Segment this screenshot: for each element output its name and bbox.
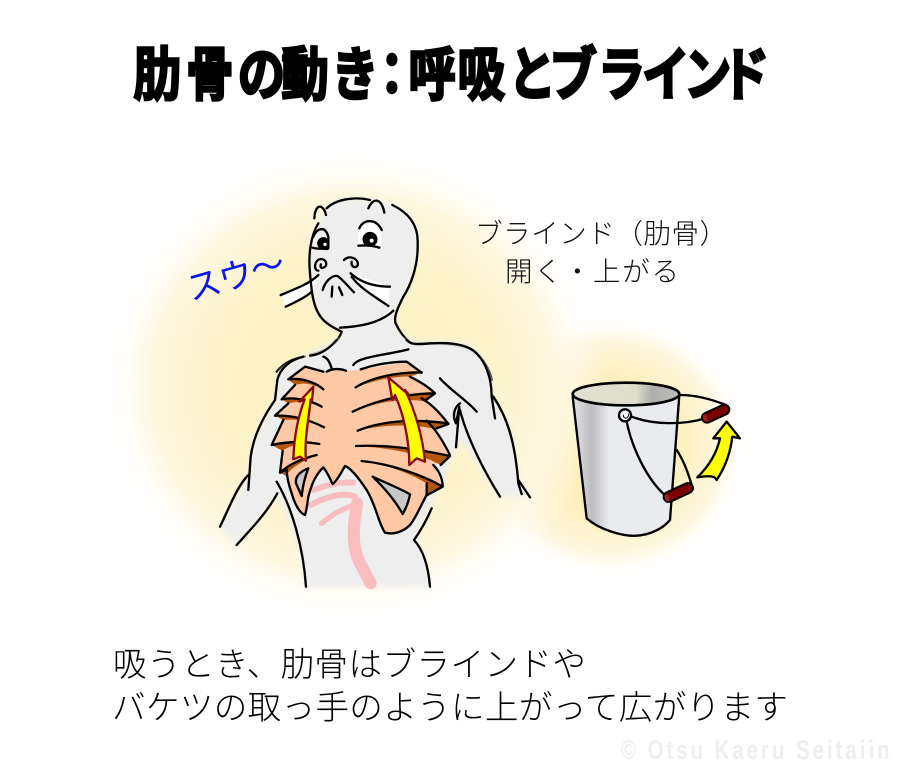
lower rib gaps	[296, 468, 308, 496]
figure: inhaling person	[220, 198, 530, 587]
caption: 吸うとき、肋骨はブラインドや	[113, 646, 586, 684]
yellow arrow: left	[293, 387, 313, 461]
rib cage shape	[272, 362, 450, 533]
label: blinds	[475, 218, 727, 287]
torso with rib cage	[220, 340, 530, 587]
bucket rim	[573, 383, 679, 405]
lowered handle	[627, 422, 692, 497]
breath sound label: スウ〜	[183, 245, 289, 309]
bucket with handle	[573, 383, 740, 536]
label: blinds: ブラインド（肋骨）	[475, 218, 727, 249]
yellow arrow: handle motion	[697, 422, 740, 480]
rib shadows	[272, 372, 450, 495]
rib lines	[353, 362, 450, 495]
title: 肋骨の動き：呼吸とブラインド	[134, 44, 769, 108]
bucket body	[573, 395, 679, 536]
head and neck	[277, 198, 492, 387]
diaphragm muscle	[311, 482, 371, 583]
label: blinds: 開く・上がる	[505, 256, 679, 287]
caption	[112, 646, 788, 727]
raised handle	[632, 395, 726, 423]
arm and torso outlines	[220, 357, 432, 587]
watermark: © Otsu Kaeru Seitaiin	[621, 735, 890, 766]
background glow	[100, 147, 748, 623]
caption: バケツの取っ手のように上がって広がります	[112, 690, 788, 727]
yellow arrow: right	[388, 377, 425, 465]
